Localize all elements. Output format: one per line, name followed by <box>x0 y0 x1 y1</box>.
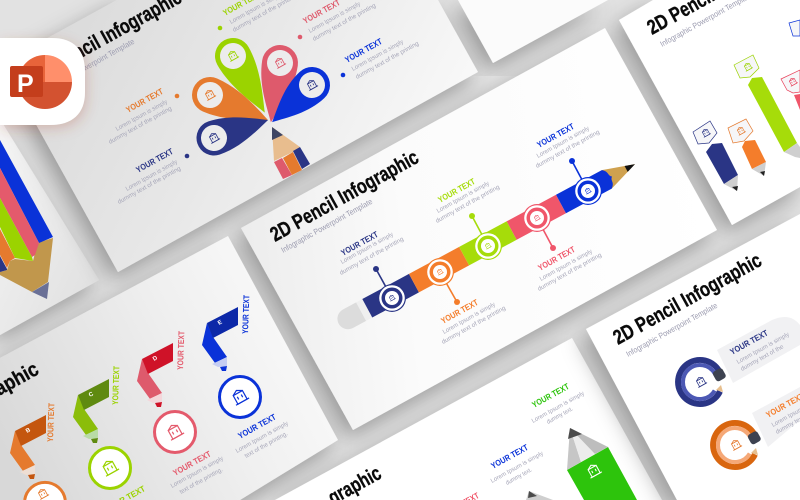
big pencil <box>0 140 53 299</box>
text: orange: dummy text of the printing <box>441 304 507 346</box>
ribbon: C: C <box>88 391 95 399</box>
text: E: Lorem Ipsum is simply <box>235 420 290 455</box>
panel: top left slide with petal pencil <box>2 0 478 272</box>
text: blue: Lorem Ipsum is simply <box>536 125 591 160</box>
ribbon: B: B <box>25 427 32 435</box>
panel: bottom left slide with ribbons <box>0 236 338 500</box>
icon: green petal <box>226 49 239 61</box>
text: blue: Lorem Ipsum is simply <box>490 450 545 485</box>
text: blue: YOUR TEXT <box>343 36 384 65</box>
text: orange: YOUR TEXT <box>439 297 480 326</box>
vertical label: D: YOUR TEXT <box>175 330 186 370</box>
text: pink: dummy text of the printing <box>312 2 378 43</box>
large green pencil <box>567 428 637 500</box>
panel: center slide with timeline pencil <box>241 28 717 430</box>
text: blue: YOUR TEXT <box>489 442 530 471</box>
panel: top middle slide <box>458 0 608 63</box>
small gray pencil tip <box>526 491 553 500</box>
panel: bottom middle slide <box>275 338 662 500</box>
text: blue: Lorem Ipsum is simply <box>351 38 405 73</box>
text: navy: dummy text of the printing <box>117 165 183 206</box>
text: D: text of the printing. <box>179 466 224 496</box>
ribbon: D <box>137 343 173 407</box>
text: orange: Lorem Ipsum is simply <box>115 98 169 133</box>
icon circle: C <box>90 448 130 488</box>
subtitle: Infographic Powerpoint Template <box>280 197 374 255</box>
text: pink: dummy text of the printing <box>537 251 603 293</box>
text: green: dummy text of the printing <box>435 183 501 225</box>
pill 2 <box>752 387 800 447</box>
vertical label: E: YOUR TEXT <box>240 294 251 334</box>
icon: PowerPoint badge <box>0 38 85 125</box>
text: green: Lorem Ipsum is simply <box>531 390 586 425</box>
stems and pins <box>373 158 588 305</box>
icon: pink petal <box>273 56 286 68</box>
icon circle: D <box>154 412 196 452</box>
ring 2 <box>713 423 762 467</box>
pencil: blue label <box>789 20 800 36</box>
text: green: YOUR TEXT <box>436 176 477 205</box>
icon: PowerPoint badge: P <box>17 70 34 98</box>
pill 1 <box>717 317 800 383</box>
panel: left slide with big pencil <box>0 119 99 335</box>
petal: green <box>208 31 281 121</box>
text: blue: dummy text of the printing <box>535 128 601 170</box>
pencil: orange <box>728 119 766 176</box>
text: pill 1: dummy text of the <box>740 343 785 373</box>
text: blue: dummy text. <box>505 466 534 487</box>
text: pink: YOUR TEXT <box>536 244 577 273</box>
text: pill 1 <box>728 327 791 373</box>
node: blue <box>574 177 602 205</box>
text: navy: Lorem Ipsum is simply <box>340 231 395 266</box>
petal: blue <box>260 60 337 135</box>
ribbon: D: D <box>152 355 159 363</box>
text: pill 1: YOUR TEXT <box>728 327 770 357</box>
dots <box>175 26 345 158</box>
text: orange: dummy text of the printing <box>108 105 174 146</box>
text: orange: YOUR TEXT <box>124 86 165 115</box>
pencil below petals <box>272 127 310 179</box>
text: D: Lorem Ipsum is simply <box>170 455 225 490</box>
text: E: text of the printing. <box>244 430 289 460</box>
pencil: green <box>734 55 800 158</box>
text: pill 1: Lorem Ipsum is simply <box>736 331 791 366</box>
petal: orange <box>186 71 275 136</box>
icon: orange petal <box>203 88 216 100</box>
pencil: navy <box>693 121 738 191</box>
text: green: Lorem Ipsum is simply <box>436 180 491 215</box>
text: navy: dummy text of the printing <box>339 235 405 277</box>
ring 1 <box>678 360 727 404</box>
panel: top right slide <box>619 0 800 225</box>
text: navy: YOUR TEXT <box>134 146 175 175</box>
pencil: pink <box>781 70 800 110</box>
node: green <box>474 232 502 260</box>
ribbon: E <box>202 307 238 371</box>
ribbon: E: E <box>217 320 223 327</box>
text: pill 2 <box>764 390 800 436</box>
subtitle: Infographic Powerpoint Template <box>42 37 136 95</box>
text: navy: YOUR TEXT <box>339 229 380 258</box>
ribbon: C <box>73 379 109 443</box>
panel: bottom right slide <box>586 214 800 500</box>
text: green: dummy text. <box>546 405 575 426</box>
title: 2D Pencil Infographic <box>609 249 766 349</box>
text: pink: Lorem Ipsum is simply <box>539 248 594 283</box>
title: 2D Pencil Infographic <box>266 146 423 246</box>
petal: navy <box>192 103 274 160</box>
timeline pencil <box>334 155 640 333</box>
vertical label: B: YOUR TEXT <box>45 402 56 442</box>
icon circle: E <box>220 376 260 418</box>
node: navy <box>378 284 406 312</box>
node: pink <box>523 204 551 232</box>
text: orange <box>108 86 174 146</box>
text: D: YOUR TEXT <box>171 448 213 478</box>
ribbon: B <box>10 415 46 479</box>
icon: blue petal <box>305 78 318 90</box>
icon: navy petal <box>207 131 220 143</box>
text: blue: dummy text of the printing <box>355 40 421 81</box>
text: E: YOUR TEXT <box>236 411 278 441</box>
node: orange <box>426 258 454 286</box>
text: blue: YOUR TEXT <box>535 121 576 150</box>
text: navy <box>117 146 183 206</box>
text: navy: Lorem Ipsum is simply <box>125 158 179 193</box>
icon circle: B <box>25 482 65 500</box>
petal: pink <box>253 42 301 125</box>
vertical label: C: YOUR TEXT <box>110 365 121 405</box>
text: green: YOUR TEXT <box>530 381 571 410</box>
subtitle: Infographic Powerpoint Template <box>625 301 719 359</box>
text: orange: Lorem Ipsum is simply <box>442 301 497 336</box>
